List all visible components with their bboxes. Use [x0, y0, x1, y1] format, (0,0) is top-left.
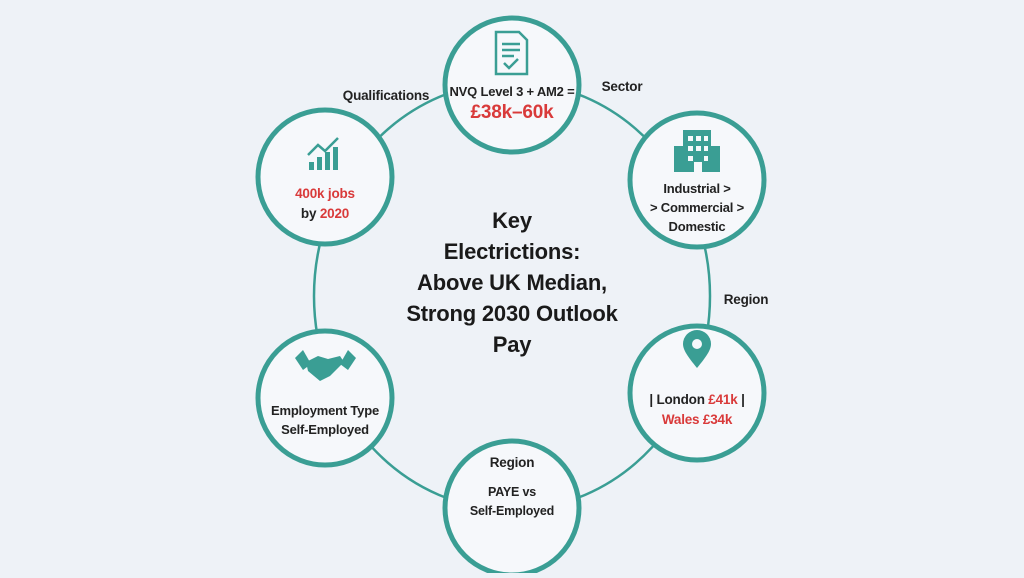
node: employment type: Self-Employed: [281, 422, 369, 437]
ring connector: [314, 82, 710, 510]
node: region london/wales: | London £41k |: [649, 392, 745, 407]
label: qualifications: Qualifications: [343, 88, 429, 103]
node: sector: Industrial >: [663, 181, 731, 196]
node: qualifications top: [445, 18, 579, 152]
icon: growth chart: [308, 138, 338, 170]
center title: Above UK Median,: [417, 270, 607, 295]
node: region bottom: Self-Employed: [470, 504, 554, 518]
node: region bottom: [445, 441, 579, 575]
node: jobs: [258, 110, 392, 244]
center title: [406, 208, 619, 357]
node: jobs: by 2020: [301, 206, 349, 221]
center title: Strong 2030 Outlook: [406, 301, 619, 326]
node: employment type: Employment Type: [271, 403, 379, 418]
node: region bottom: Region: [490, 455, 534, 470]
node: qualifications top: NVQ Level 3 + AM2 =: [449, 84, 575, 99]
icon: buildings: [674, 130, 720, 172]
node: employment type: [258, 331, 392, 465]
icon: location pin: [683, 330, 711, 368]
icon: document check: [496, 32, 527, 74]
node: jobs: 400k jobs: [295, 186, 355, 201]
node: region london/wales: Wales £34k: [662, 412, 733, 427]
center title: Key: [492, 208, 533, 233]
center title: Electrictions:: [444, 239, 580, 264]
node: region bottom: PAYE vs: [488, 485, 536, 499]
icon: handshake: [295, 350, 356, 381]
node: qualifications top: £38k–60k: [471, 102, 554, 123]
node: region london/wales: [630, 326, 764, 460]
node: sector: Domestic: [669, 219, 725, 234]
node: sector: [630, 113, 764, 247]
center title: Pay: [493, 332, 532, 357]
node: sector: > Commercial >: [650, 200, 745, 215]
label: sector: Sector: [602, 79, 643, 94]
label: region: Region: [724, 292, 768, 307]
